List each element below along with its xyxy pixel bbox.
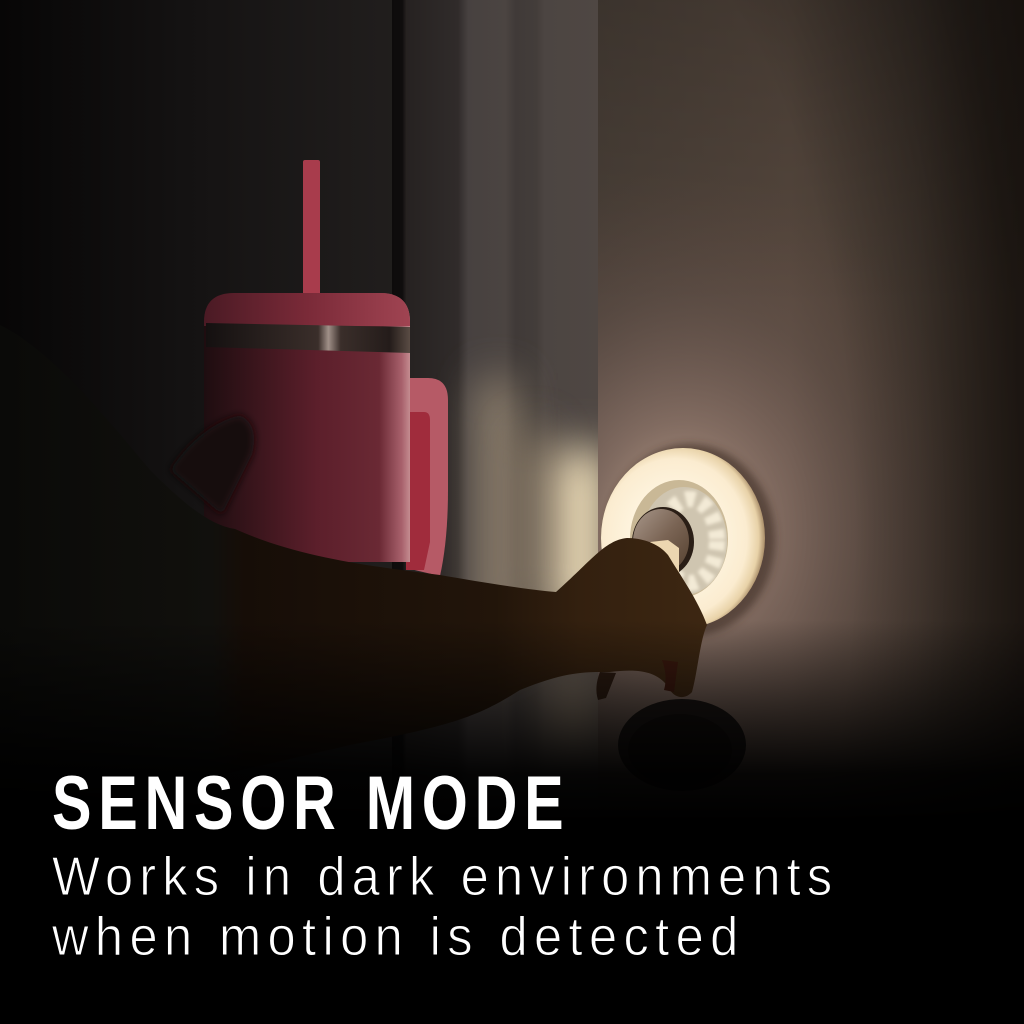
icon: motion sensor night light: [601, 444, 775, 636]
wall right shadow: [598, 0, 1024, 1024]
door handle: [618, 699, 746, 791]
description: Works in dark environments: [52, 846, 832, 907]
light halo on wall: [598, 270, 894, 718]
background: door frame: [392, 0, 598, 1024]
icon: pink tumbler: [170, 160, 448, 576]
light falling on door frame: [480, 380, 608, 760]
title: SENSOR MODE: [52, 761, 564, 846]
description: [51, 846, 832, 967]
background: dark room: [0, 0, 400, 1024]
bottom dark gradient: [0, 620, 1024, 1024]
description: when motion is detected: [51, 906, 738, 967]
silhouette: arm and hand: [0, 325, 707, 800]
background: wall: [598, 0, 1024, 1024]
